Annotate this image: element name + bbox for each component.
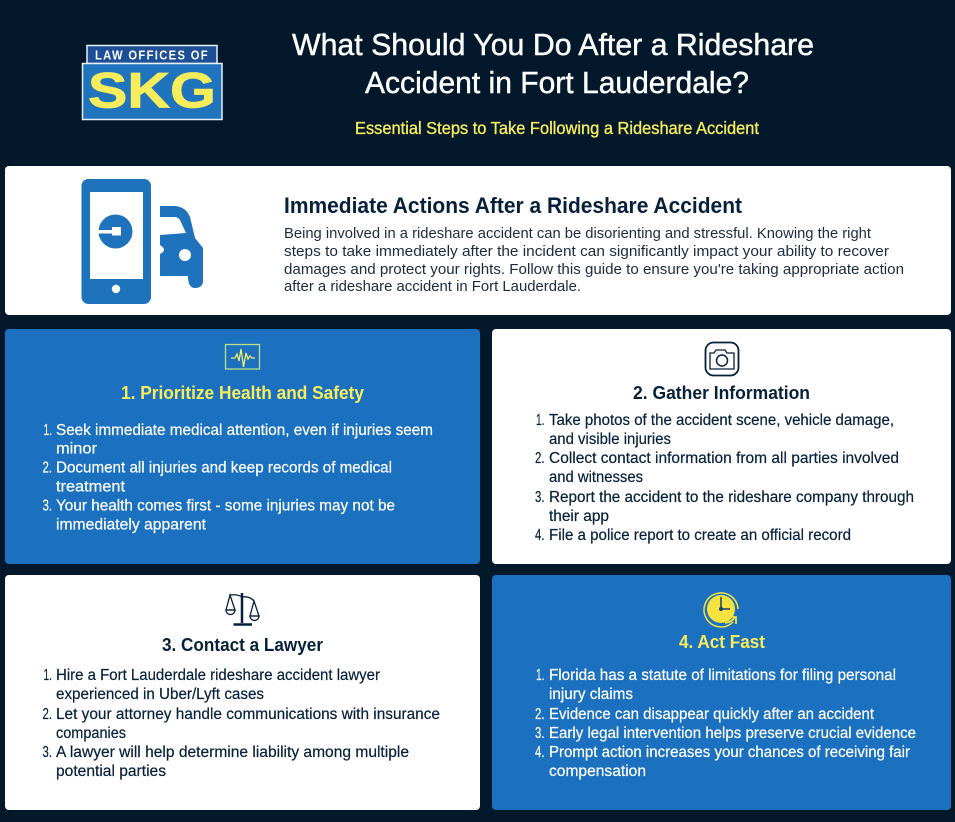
list: Your health comes first - some injuries may not be xyxy=(56,498,395,514)
icon: phone and car xyxy=(82,179,203,304)
list: 1. xyxy=(536,412,544,429)
icon: camera xyxy=(706,342,738,376)
list: Take photos of the accident scene, vehicle damage, xyxy=(549,412,894,429)
panel: 2 gather information xyxy=(492,329,951,564)
list: 4. xyxy=(535,527,544,544)
heading: 3. Contact a Lawyer xyxy=(162,634,323,655)
heading: 1. Prioritize Health and Safety xyxy=(121,382,365,403)
list: Florida has a statute of limitations for filing personal xyxy=(549,667,896,684)
icon: scales of justice xyxy=(226,593,259,624)
heading: 4. Act Fast xyxy=(679,631,765,652)
intro paragraph: after a rideshare accident in Fort Lauderdale. xyxy=(284,278,581,295)
list: experienced in Uber/Lyft cases xyxy=(56,686,264,703)
intro paragraph: damages and protect your rights. Follow this guide to ensure you're taking appropriate action xyxy=(284,261,904,278)
list: and witnesses xyxy=(549,469,643,486)
heading: 2. Gather Information xyxy=(633,382,810,403)
icon: heartbeat monitor xyxy=(226,344,260,369)
list: Seek immediate medical attention, even if injuries seem xyxy=(56,422,433,439)
list: companies xyxy=(56,725,126,742)
title: Accident in Fort Lauderdale? xyxy=(365,65,749,100)
list: 3. xyxy=(535,489,544,506)
list: 1. xyxy=(44,422,52,439)
list: Document all injuries and keep records of medical xyxy=(56,460,392,476)
title xyxy=(292,27,814,100)
list: 2. xyxy=(535,706,544,723)
list: A lawyer will help determine liability among multiple xyxy=(56,744,409,761)
logo: Law Offices of SKG: SKG xyxy=(88,62,216,118)
list: 4. xyxy=(535,744,544,761)
heading: Immediate Actions After a Rideshare Accident xyxy=(284,193,743,218)
intro paragraph: steps to take immediately after the incident can significantly impact your ability to recover xyxy=(284,243,889,260)
list: 2. xyxy=(42,460,52,476)
logo: Law Offices of SKG: LAW OFFICES OF xyxy=(95,48,209,62)
list: Hire a Fort Lauderdale rideshare accident lawyer xyxy=(56,667,380,684)
panel: 4 act fast xyxy=(492,575,951,810)
list: File a police report to create an official record xyxy=(549,527,851,544)
list: 1. xyxy=(536,667,544,684)
list: their app xyxy=(549,508,609,525)
list: Collect contact information from all parties involved xyxy=(549,450,899,467)
list: Early legal intervention helps preserve crucial evidence xyxy=(549,725,916,742)
list: Evidence can disappear quickly after an accident xyxy=(549,706,875,723)
list: minor xyxy=(56,440,97,458)
list xyxy=(42,422,433,534)
list: Let your attorney handle communications with insurance xyxy=(56,706,440,723)
list: and visible injuries xyxy=(549,431,671,448)
subtitle: Essential Steps to Take Following a Rideshare Accident xyxy=(355,118,759,138)
intro paragraph: Being involved in a rideshare accident can be disorienting and stressful. Knowing the right xyxy=(284,225,872,242)
list: injury claims xyxy=(549,686,633,703)
list: potential parties xyxy=(56,763,166,780)
panel: 1 prioritize health and safety xyxy=(5,329,480,564)
logo: Law Offices of SKG xyxy=(82,46,222,120)
list: immediately apparent xyxy=(56,516,207,534)
list: 2. xyxy=(42,706,52,723)
panel: 3 contact a lawyer xyxy=(5,575,480,810)
list: 1. xyxy=(44,667,52,684)
list: 3. xyxy=(42,498,52,514)
list: treatment xyxy=(56,478,126,496)
list: 2. xyxy=(535,450,544,467)
list: Prompt action increases your chances of receiving fair xyxy=(549,744,910,761)
list: 3. xyxy=(535,725,544,742)
list xyxy=(42,667,440,780)
list xyxy=(535,667,916,780)
list: 3. xyxy=(42,744,52,761)
list: Report the accident to the rideshare company through xyxy=(549,489,914,506)
list: compensation xyxy=(549,763,646,780)
title: What Should You Do After a Rideshare xyxy=(292,27,814,62)
panel: immediate actions xyxy=(5,166,951,315)
icon: clock with arrow xyxy=(704,593,738,627)
intro paragraph xyxy=(284,225,904,295)
list xyxy=(535,412,914,544)
